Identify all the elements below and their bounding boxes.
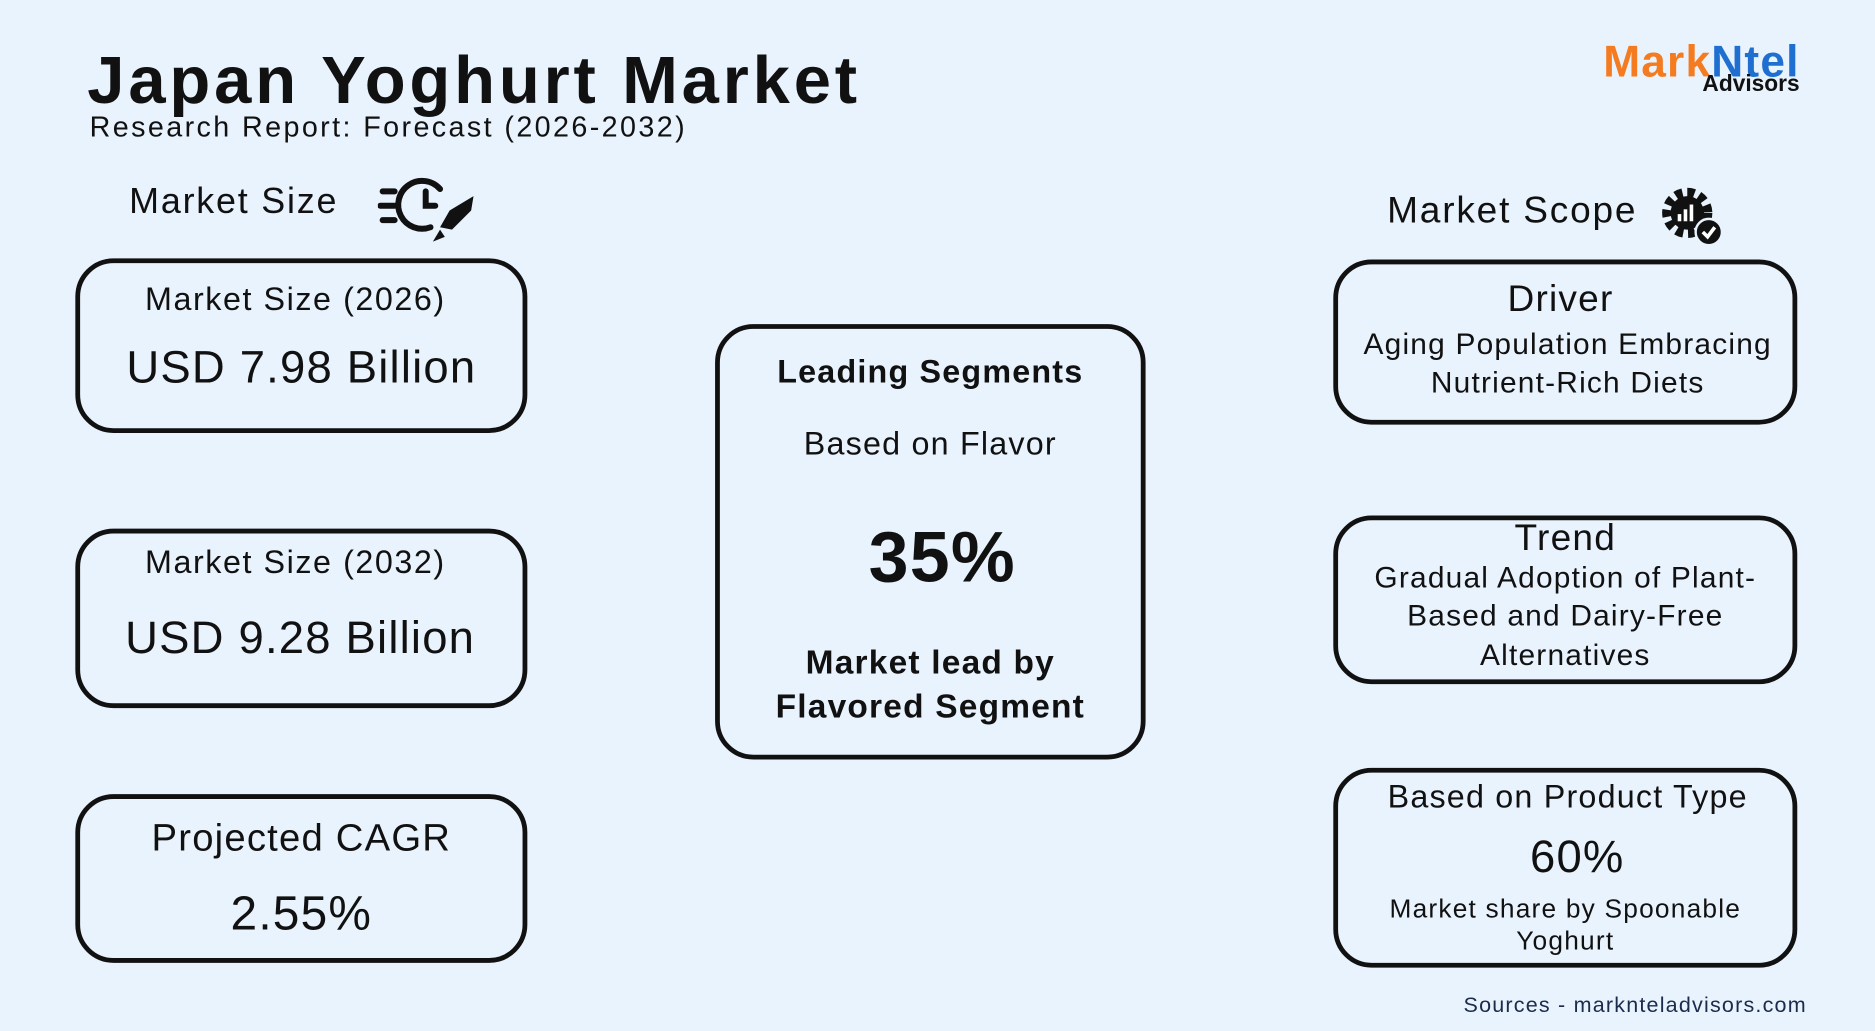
logo: MarkNtel — [1603, 37, 1800, 86]
card: CAGR: 2.55% — [231, 887, 372, 940]
card: driver — [1333, 260, 1797, 425]
card: market size 2026 — [75, 258, 527, 433]
icon: clock rocket — [378, 178, 474, 242]
card: driver: Nutrient-Rich Diets — [1431, 366, 1704, 399]
card: trend: Based and Dairy-Free — [1407, 599, 1723, 633]
card: CAGR — [75, 794, 527, 963]
card: product type — [1333, 768, 1797, 968]
panel: leading segments: 35% — [869, 517, 1016, 597]
card: trend: Gradual Adoption of Plant- — [1374, 561, 1756, 594]
icon: gear — [1662, 188, 1721, 244]
card: trend — [1333, 516, 1797, 684]
card: market size 2032 — [75, 529, 527, 708]
card: market size 2032: Market Size (2032) — [145, 544, 446, 580]
card: trend: Alternatives — [1480, 639, 1651, 672]
card: product type: Yoghurt — [1516, 926, 1614, 956]
panel: leading segments — [715, 324, 1146, 759]
panel: leading segments: Leading Segments — [777, 354, 1083, 390]
card: product type: 60% — [1530, 832, 1625, 883]
logo: Advisors — [1702, 72, 1800, 97]
title: Japan Yoghurt Market — [87, 42, 861, 117]
card: driver: Driver — [1507, 277, 1614, 319]
panel: leading segments: Market lead by — [806, 643, 1055, 681]
card: trend: Trend — [1515, 517, 1616, 559]
card: market size 2026: USD 7.98 Billion — [126, 343, 476, 394]
card: market size 2032: USD 9.28 Billion — [125, 614, 475, 664]
panel: leading segments: Flavored Segment — [776, 688, 1085, 725]
subtitle: Research Report: Forecast (2026-2032) — [90, 111, 687, 144]
card: driver: Aging Population Embracing — [1363, 328, 1772, 361]
heading: market size: Market Size — [129, 182, 338, 221]
card: market size 2026: Market Size (2026) — [145, 281, 446, 317]
sources: Sources - marknteladvisors.com — [1464, 993, 1807, 1017]
card: CAGR: Projected CAGR — [152, 816, 451, 859]
card: product type: Based on Product Type — [1388, 779, 1748, 815]
panel: leading segments: Based on Flavor — [804, 426, 1057, 462]
heading: market scope: Market Scope — [1387, 189, 1637, 231]
card: product type: Market share by Spoonable — [1389, 893, 1741, 923]
